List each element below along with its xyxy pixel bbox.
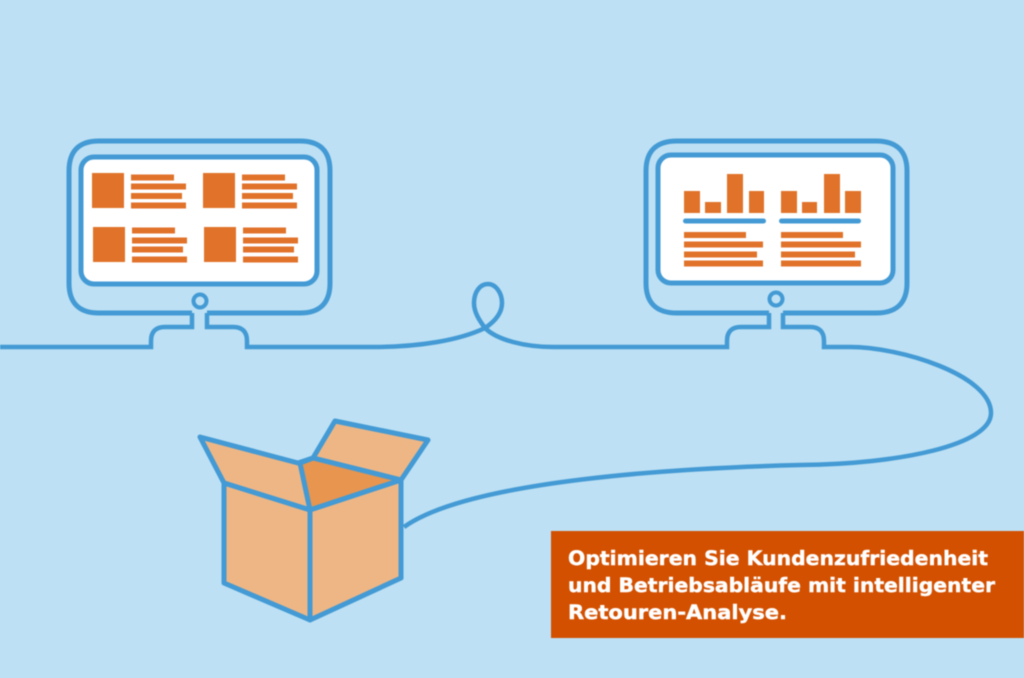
power button right [770, 292, 782, 306]
monitor frame left [69, 141, 330, 313]
box left flap [200, 437, 313, 510]
text lines 2 [781, 232, 861, 266]
bar chart 1 [684, 174, 764, 213]
screen left [81, 157, 317, 284]
callout text: und Betriebsabläufe mit intelligenter [568, 574, 995, 597]
power button left [194, 294, 206, 308]
box right face [310, 480, 401, 620]
monitor: left, product grid [69, 141, 330, 313]
connecting cable with loop [0, 284, 991, 527]
chart axis lines [683, 218, 861, 224]
product card 2 [203, 173, 297, 208]
monitor: right, analytics [646, 141, 907, 313]
product card 4 [204, 227, 298, 262]
callout text [568, 547, 995, 624]
box inside [300, 458, 401, 510]
box back flap [313, 421, 428, 480]
bar chart 2 [781, 174, 861, 213]
callout banner [551, 531, 1024, 638]
callout text: Retouren-Analyse. [568, 601, 787, 624]
monitor frame right [646, 141, 907, 313]
open cardboard box [200, 421, 428, 620]
text lines 1 [684, 232, 763, 266]
product card 3 [93, 227, 187, 262]
product card 1 [92, 173, 186, 208]
box left face [224, 483, 310, 620]
callout text: Optimieren Sie Kundenzufriedenheit [568, 547, 988, 570]
screen right [658, 155, 893, 283]
